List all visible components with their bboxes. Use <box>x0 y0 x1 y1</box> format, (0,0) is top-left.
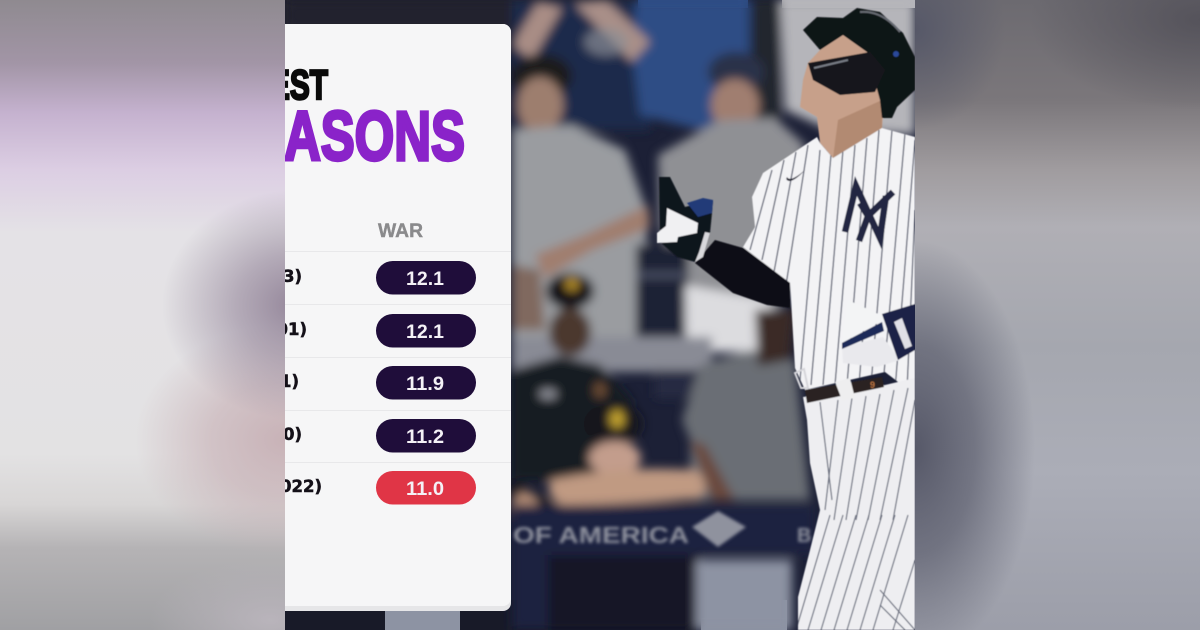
panel: left blurred side <box>0 0 285 630</box>
icon: batting glove pointing up <box>657 177 713 262</box>
row 3 <box>280 366 476 400</box>
row 1: 12.1 <box>406 269 444 290</box>
row 5: 11.0 <box>406 479 444 500</box>
title line: best: EST <box>270 61 328 108</box>
row 1: 3) <box>283 267 302 286</box>
lower hand and wristband <box>842 300 915 367</box>
pinstripes <box>750 130 915 390</box>
jersey <box>743 128 915 395</box>
banner lettering: OF AMERICA <box>513 522 689 548</box>
photo: baseball player and dugout crowd <box>285 0 915 630</box>
belt: 9 <box>870 380 875 390</box>
icon: swoosh logo <box>786 170 805 181</box>
row 4 <box>283 419 476 452</box>
row 5 <box>280 471 476 504</box>
row 5: 022) <box>280 477 322 496</box>
pinstripes <box>796 388 915 630</box>
player figure <box>657 8 915 630</box>
row 2 <box>276 314 476 348</box>
panel: stats card <box>200 24 511 611</box>
photo base layer <box>285 0 915 630</box>
arm sleeve <box>695 240 790 308</box>
icon: batting helmet <box>803 8 915 118</box>
banner lettering: B <box>797 525 811 547</box>
row 2: 01) <box>276 320 307 339</box>
neck and face <box>800 35 884 158</box>
face guard <box>808 52 885 95</box>
row 3: 11.9 <box>406 374 444 395</box>
row 4: 0) <box>283 425 302 444</box>
row 1 <box>283 261 476 294</box>
icon: NY team logo <box>845 186 893 241</box>
row 2: 12.1 <box>406 322 444 343</box>
column header: WAR: WAR <box>378 220 423 242</box>
blurred crowd background <box>508 0 915 630</box>
row 4: 11.2 <box>406 427 444 448</box>
banner lettering <box>513 511 811 548</box>
panel: right blurred side <box>915 0 1200 630</box>
row 3: 1) <box>280 372 299 391</box>
belt <box>795 369 884 403</box>
pants <box>796 378 915 630</box>
title line: seasons: EASONS <box>250 97 465 175</box>
